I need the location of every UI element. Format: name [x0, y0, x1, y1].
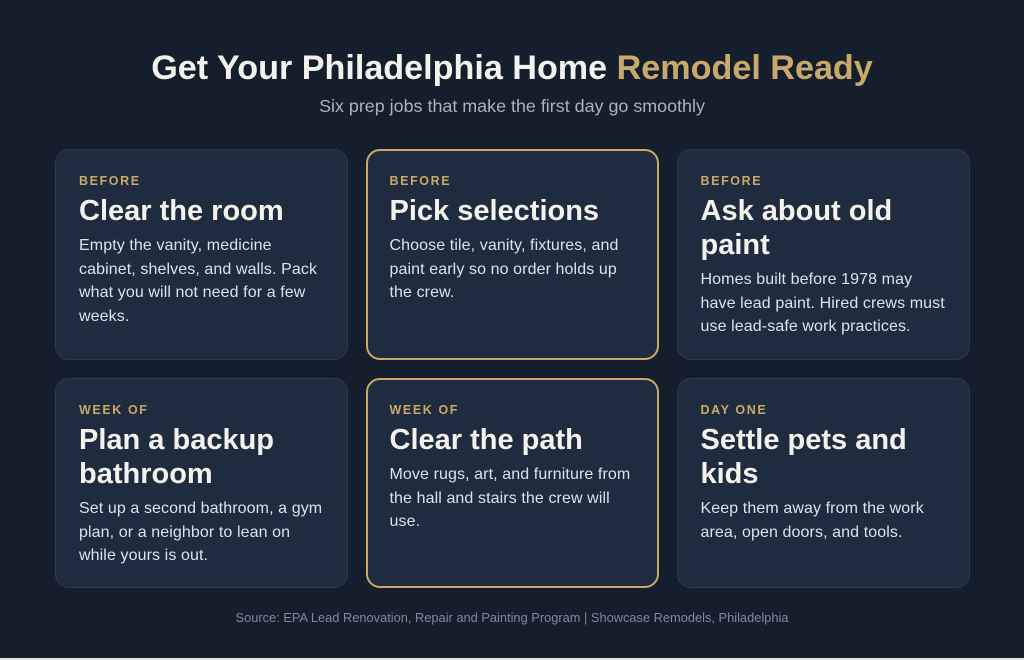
panel: settle pets and kids: kids [700, 458, 759, 490]
panel: pick selections: the crew. [390, 284, 454, 301]
panel: clear the room: Clear the room [79, 194, 284, 226]
panel: pick selections: Pick selections [390, 194, 599, 226]
panel: clear the room [55, 149, 348, 360]
panel: settle pets and kids: Keep them away from the work [700, 500, 924, 517]
panel: ask about old paint: BEFORE [700, 174, 762, 188]
panel: plan a backup bathroom: plan, or a neighbor to lean on [79, 524, 290, 540]
panel: ask about old paint: use lead-safe work practices. [700, 318, 911, 335]
panel: ask about old paint [677, 149, 970, 360]
panel: pick selections: BEFORE [390, 174, 451, 188]
panel: settle pets and kids: DAY ONE [700, 402, 767, 416]
panel: clear the path: Clear the path [390, 424, 583, 456]
panel: pick selections: Choose tile, vanity, fixtures, and [390, 237, 618, 254]
panel: plan a backup bathroom: Plan a backup [79, 424, 274, 456]
panel: plan a backup bathroom [55, 378, 348, 588]
panel: clear the room: cabinet, shelves, and walls. Pack [79, 260, 317, 278]
panel: clear the path: WEEK OF [390, 402, 459, 416]
panel: ask about old paint: Ask about old [700, 194, 892, 226]
panel: clear the room: weeks. [79, 308, 129, 324]
panel: settle pets and kids: area, open doors, and tools. [700, 524, 903, 540]
panel: clear the path: the hall and stairs the crew will [390, 490, 610, 506]
panel: pick selections [366, 149, 659, 360]
source footer: Source: EPA Lead Renovation, Repair and Painting Program | Showcase Remodels, Philadelphia [236, 610, 788, 625]
panel: clear the path: Move rugs, art, and furniture from [390, 466, 630, 483]
panel: plan a backup bathroom: WEEK OF [79, 402, 149, 416]
panel: pick selections: paint early so no order holds up [390, 260, 617, 278]
panel: clear the room: BEFORE [79, 174, 141, 188]
panel: plan a backup bathroom: Set up a second bathroom, a gym [79, 500, 322, 517]
panel: ask about old paint: have lead paint. Hired crews must [700, 294, 945, 312]
panel: clear the room: Empty the vanity, medicine [79, 237, 272, 254]
panel: clear the path: use. [390, 513, 420, 530]
subtitle: Six prep jobs that make the first day go smoothly [319, 96, 705, 116]
panel: clear the path [366, 378, 659, 588]
title: Get Your Philadelphia Home Remodel Ready [151, 49, 873, 87]
panel: settle pets and kids [677, 378, 970, 588]
panel: ask about old paint: Homes built before 1978 may [700, 271, 912, 288]
panel: plan a backup bathroom: bathroom [79, 458, 213, 490]
panel: plan a backup bathroom: while yours is out. [79, 547, 208, 564]
panel: clear the room: what you will not need for a few [79, 284, 305, 301]
panel: settle pets and kids: Settle pets and [700, 424, 907, 456]
panel: ask about old paint: paint [700, 228, 770, 260]
